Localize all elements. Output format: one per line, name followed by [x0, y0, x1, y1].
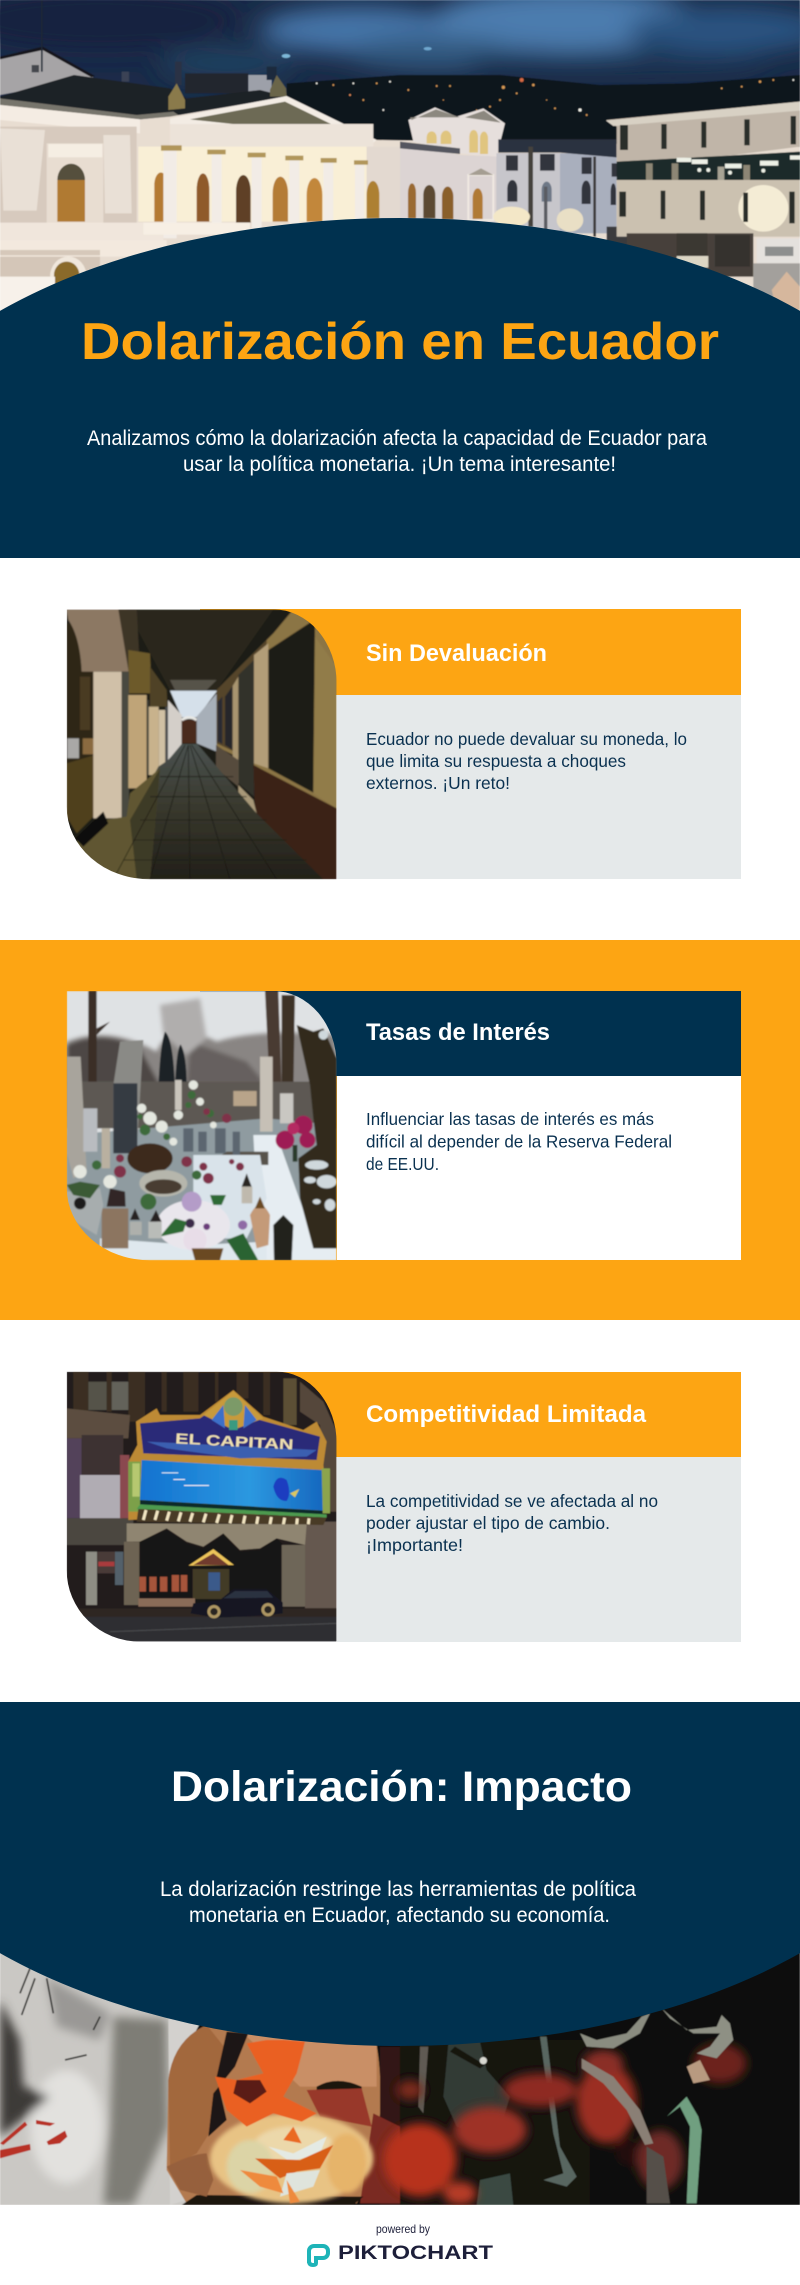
- card body text: difícil al depender de la Reserva Federal: [366, 1132, 672, 1152]
- photo: El Capitan theatre: EL CAPITAN: [175, 1431, 294, 1454]
- hero photo: Quito palace at night: [0, 0, 800, 327]
- card body text: ¡Importante!: [366, 1535, 463, 1555]
- card body background: [337, 1457, 741, 1642]
- columns: [163, 148, 364, 238]
- panel: orange band: [0, 940, 800, 1320]
- impact heading: Dolarización: Impacto: [171, 1763, 632, 1811]
- photo: arcade corridor at night: [67, 609, 337, 879]
- panel: Competitividad Limitada: [67, 1372, 741, 1642]
- card body text: poder ajustar el tipo de cambio.: [366, 1513, 610, 1533]
- main wall: [0, 97, 800, 327]
- card body background: [337, 1076, 741, 1260]
- card body text: externos. ¡Un reto!: [366, 773, 510, 793]
- impact text: La dolarización restringe las herramientas de política: [160, 1878, 636, 1901]
- card body text: La competitividad se ve afectada al no: [366, 1491, 658, 1511]
- Piktochart wordmark: PIKTOCHART: [338, 2243, 493, 2264]
- card body text: Ecuador no puede devaluar su moneda, lo: [366, 729, 687, 749]
- icon: Piktochart logo mark: [309, 2246, 328, 2265]
- card header bar: [200, 991, 741, 1076]
- card body text: de EE.UU.: [366, 1154, 439, 1174]
- card body background: [337, 695, 741, 879]
- intro text: Analizamos cómo la dolarización afecta la capacidad de Ecuador para: [87, 427, 707, 450]
- right block: [606, 102, 800, 163]
- panel: Tasas de Interés: [67, 991, 741, 1260]
- panel: Sin Devaluación: [67, 609, 741, 879]
- flames: [215, 2040, 317, 2127]
- impact background with arc: [0, 1700, 800, 2046]
- card body text: [366, 1491, 658, 1555]
- card body text: Influenciar las tasas de interés es más: [366, 1109, 654, 1129]
- hero arc background: [0, 218, 800, 560]
- panel: hero: [0, 0, 800, 560]
- photo: El Capitan theatre: [67, 1372, 337, 1642]
- photo: snowy cemetery: [67, 991, 337, 1260]
- pumpkin: [210, 2113, 373, 2203]
- impact text: [160, 1878, 636, 1927]
- intro text: [87, 427, 707, 476]
- card heading: Sin Devaluación: [366, 640, 547, 667]
- impact text: monetaria en Ecuador, afectando su economía.: [189, 1904, 610, 1927]
- footer: powered by Piktochart: [309, 2222, 493, 2265]
- pediment: [170, 96, 377, 143]
- arched windows: [57, 164, 379, 223]
- card heading: Tasas de Interés: [366, 1019, 550, 1046]
- right half: [383, 2008, 747, 2205]
- right half: [400, 102, 800, 310]
- title: Dolarización en Ecuador: [81, 313, 719, 371]
- card body text: que limita su respuesta a choques: [366, 751, 626, 771]
- woman: [167, 2025, 380, 2203]
- card header bar: [200, 609, 741, 695]
- powered by label: powered by: [376, 2222, 430, 2236]
- machinery on roof: [175, 62, 182, 85]
- annex: [0, 49, 93, 95]
- panel: impact conclusion: [0, 1700, 800, 2205]
- wall: [0, 1940, 187, 2205]
- card body text: [366, 1109, 672, 1174]
- card heading: Competitividad Limitada: [366, 1401, 647, 1428]
- mid building: [497, 153, 617, 233]
- card body text: [366, 729, 687, 793]
- photo: burning pumpkin and smoke: [0, 1940, 800, 2205]
- roof: [0, 75, 287, 118]
- intro text: usar la política monetaria. ¡Un tema interesante!: [183, 453, 616, 476]
- card header bar: [200, 1372, 741, 1457]
